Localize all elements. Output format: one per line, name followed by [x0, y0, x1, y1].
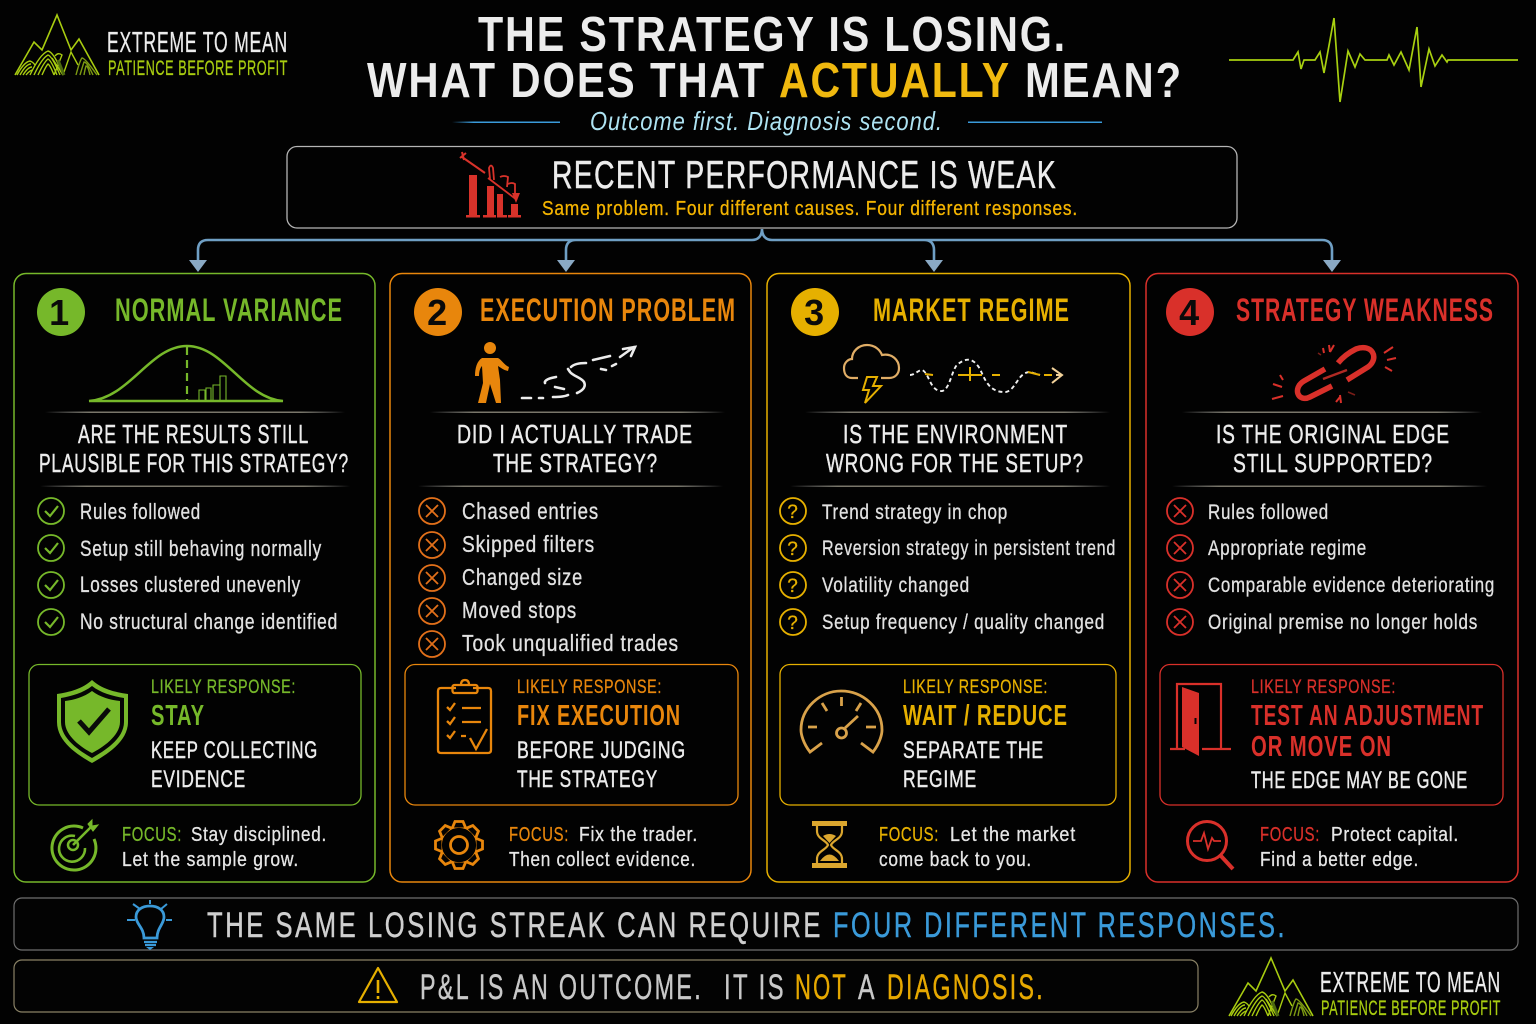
checklist: No structural change identified [80, 609, 338, 634]
checklist: Moved stops [462, 597, 577, 623]
panel: normal variance [14, 274, 375, 882]
heading: NORMAL VARIANCE [115, 292, 343, 328]
response box: SEPARATE THE [903, 737, 1044, 764]
focus text [879, 823, 1076, 871]
icon: bell curve [89, 346, 283, 401]
focus text: Protect capital. [1331, 823, 1459, 846]
checklist [419, 498, 679, 657]
focus text: FOCUS: [509, 823, 569, 846]
question: WRONG FOR THE SETUP? [826, 450, 1084, 478]
response box: WAIT / REDUCE [903, 700, 1068, 732]
focus text: Find a better edge. [1260, 848, 1419, 871]
response box [29, 664, 361, 805]
icon: exit door [1170, 684, 1231, 756]
response box: FIX EXECUTION [517, 700, 681, 732]
title: THE STRATEGY IS LOSING. [478, 8, 1067, 62]
number badge: 2 [427, 292, 449, 333]
heading: MARKET REGIME [873, 292, 1070, 328]
focus text: Stay disciplined. [191, 823, 327, 846]
number badge: 1 [49, 292, 71, 333]
focus text: FOCUS: [122, 823, 182, 846]
icon: gear [436, 822, 482, 868]
response box [780, 664, 1116, 805]
number badge [1166, 288, 1214, 336]
title [367, 8, 1183, 108]
checklist: Rules followed [80, 499, 201, 524]
icon: mountain logo [15, 15, 99, 75]
checklist [1167, 498, 1495, 635]
callout: P&L is an outcome: DIAGNOSIS. [887, 968, 1045, 1007]
response box: LIKELY RESPONSE: [1251, 676, 1396, 698]
response box: THE STRATEGY [517, 766, 658, 793]
checklist: ? [787, 502, 799, 523]
checklist: Skipped filters [462, 531, 595, 557]
icon: speedometer [801, 691, 882, 752]
brand tagline: PATIENCE BEFORE PROFIT [108, 57, 288, 80]
response box: EVIDENCE [151, 766, 246, 793]
checklist: Reversion strategy in persistent trend [822, 536, 1116, 560]
response box: KEEP COLLECTING [151, 737, 318, 764]
question [457, 421, 693, 478]
icon: storm cloud and wave [844, 345, 1062, 403]
response box: OR MOVE ON [1251, 731, 1392, 763]
checklist: Changed size [462, 564, 583, 590]
icon: light bulb [127, 900, 172, 950]
icon: clipboard [438, 680, 491, 753]
response box [405, 664, 738, 805]
focus text: Let the market [950, 823, 1076, 846]
logo bottom right [1229, 958, 1501, 1020]
question [39, 421, 349, 478]
response box: REGIME [903, 766, 977, 793]
response box [1160, 664, 1503, 805]
question [826, 421, 1084, 478]
question: THE STRATEGY? [493, 450, 658, 478]
focus text: come back to you. [879, 848, 1032, 871]
panel: market regime [767, 274, 1130, 882]
question [1216, 421, 1450, 478]
callout: P&L is an outcome: A [858, 968, 877, 1007]
title: ACTUALLY [779, 54, 1011, 108]
icon: broken chain [1272, 345, 1396, 403]
heading: EXECUTION PROBLEM [480, 292, 736, 328]
focus text [1260, 823, 1459, 871]
checklist: Setup frequency / quality changed [822, 610, 1105, 634]
focus text [509, 823, 698, 871]
checklist: Chased entries [462, 498, 599, 524]
checklist: Appropriate regime [1208, 536, 1367, 560]
response box: STAY [151, 700, 205, 732]
focus text: Then collect evidence. [509, 848, 696, 871]
focus text: FOCUS: [1260, 823, 1320, 846]
checklist [38, 498, 338, 635]
icon: target [52, 820, 98, 870]
focus text: FOCUS: [879, 823, 939, 846]
checklist: Volatility changed [822, 573, 970, 597]
question: STILL SUPPORTED? [1233, 450, 1433, 478]
checklist: ? [787, 613, 799, 634]
checklist: Setup still behaving normally [80, 536, 322, 561]
icon: falling bar chart [460, 152, 521, 218]
number badge: 3 [804, 292, 826, 333]
title: MEAN? [1025, 54, 1183, 108]
checklist [780, 498, 1116, 635]
icon: shield [57, 680, 128, 763]
arrows: connector tree [189, 229, 1341, 272]
callout: four responses: THE SAME LOSING STREAK CAN REQUIRE [207, 906, 823, 945]
number badge [37, 288, 85, 336]
panel: execution problem [390, 274, 751, 882]
subheading: Same problem. Four different causes. Four different responses. [542, 198, 1078, 220]
icon: heartbeat line [1229, 18, 1518, 102]
icon: magnifier with pulse [1188, 822, 1233, 869]
icon: warning triangle [359, 968, 397, 1002]
question: IS THE ENVIRONMENT [843, 421, 1068, 449]
number badge [791, 288, 839, 336]
icon: person on broken path [475, 342, 635, 403]
callout: four responses: FOUR DIFFERENT RESPONSES. [833, 906, 1287, 945]
focus text: Fix the trader. [579, 823, 698, 846]
callout: P&L is an outcome: IT IS [724, 968, 786, 1007]
checklist: Took unqualified trades [462, 630, 679, 656]
panel: recent performance [287, 146, 1237, 228]
focus text: Let the sample grow. [122, 848, 299, 871]
checklist: ? [787, 576, 799, 597]
question: ARE THE RESULTS STILL [78, 421, 309, 449]
response box: LIKELY RESPONSE: [903, 676, 1048, 698]
question: IS THE ORIGINAL EDGE [1216, 421, 1450, 449]
checklist: Losses clustered unevenly [80, 572, 301, 597]
response box: BEFORE JUDGING [517, 737, 686, 764]
question: PLAUSIBLE FOR THIS STRATEGY? [39, 450, 349, 478]
number badge [414, 288, 462, 336]
subtitle: Outcome first. Diagnosis second. [590, 106, 943, 136]
title: WHAT DOES THAT [367, 54, 766, 108]
focus text [122, 823, 327, 871]
heading: RECENT PERFORMANCE IS WEAK [552, 154, 1057, 197]
icon: mountain logo [1229, 958, 1313, 1016]
panel: strategy weakness [1146, 274, 1518, 882]
response box: LIKELY RESPONSE: [151, 676, 296, 698]
callout: P&L is an outcome: P&L IS AN OUTCOME. [420, 968, 703, 1007]
checklist: Trend strategy in chop [822, 500, 1008, 524]
logo top left [15, 15, 288, 80]
response box: LIKELY RESPONSE: [517, 676, 662, 698]
question: DID I ACTUALLY TRADE [457, 421, 693, 449]
checklist: ? [787, 539, 799, 560]
callout: P&L is an outcome [14, 960, 1198, 1012]
callout: four responses [14, 898, 1518, 950]
icon: hourglass [812, 821, 847, 868]
number badge: 4 [1179, 292, 1201, 333]
brand name: EXTREME TO MEAN [107, 27, 288, 59]
checklist: Rules followed [1208, 500, 1329, 524]
callout: P&L is an outcome: NOT [795, 968, 848, 1007]
